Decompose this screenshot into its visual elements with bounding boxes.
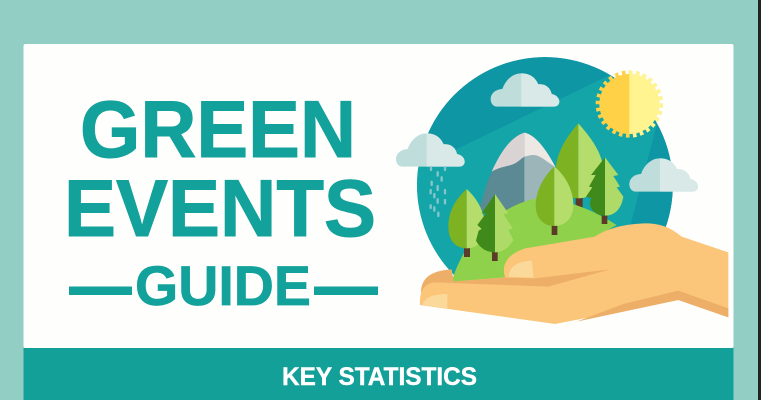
title line: GUIDE with rules: [69, 254, 378, 317]
icon: mountain: [479, 133, 563, 210]
icon: sun: [598, 73, 661, 135]
icon: right cloud: [629, 158, 698, 192]
tree: right pine: [586, 157, 623, 224]
tree: middle tree: [536, 167, 573, 235]
back finger shadow: [421, 269, 454, 293]
icon: top cloud: [491, 73, 559, 107]
hill: [452, 199, 617, 282]
palm crease shadow: [435, 269, 610, 287]
thumb nail: [508, 261, 534, 278]
wrist shadow: [577, 291, 728, 322]
tree: left pine: [476, 194, 513, 261]
finger nail: [422, 294, 447, 308]
hand silhouette: [420, 223, 728, 324]
globe background: [417, 57, 673, 275]
icon: rain cloud: [396, 133, 465, 167]
hand: [420, 223, 728, 324]
title line: GREEN: GREEN: [80, 85, 356, 175]
panel: white title card: [24, 44, 734, 348]
banner heading: KEY STATISTICS: [282, 363, 477, 391]
title line: GUIDE with rules: GUIDE: [135, 254, 311, 317]
title: Green Events Guide: [64, 85, 378, 317]
illustration: hand holding landscape: [390, 57, 728, 324]
banner: key statistics: [24, 348, 734, 400]
title line: EVENTS: EVENTS: [64, 164, 376, 254]
page edge line: [758, 0, 761, 400]
tree: big back tree: [556, 123, 603, 209]
tree: left tree: [448, 189, 485, 257]
icon: rain drops: [431, 167, 445, 216]
